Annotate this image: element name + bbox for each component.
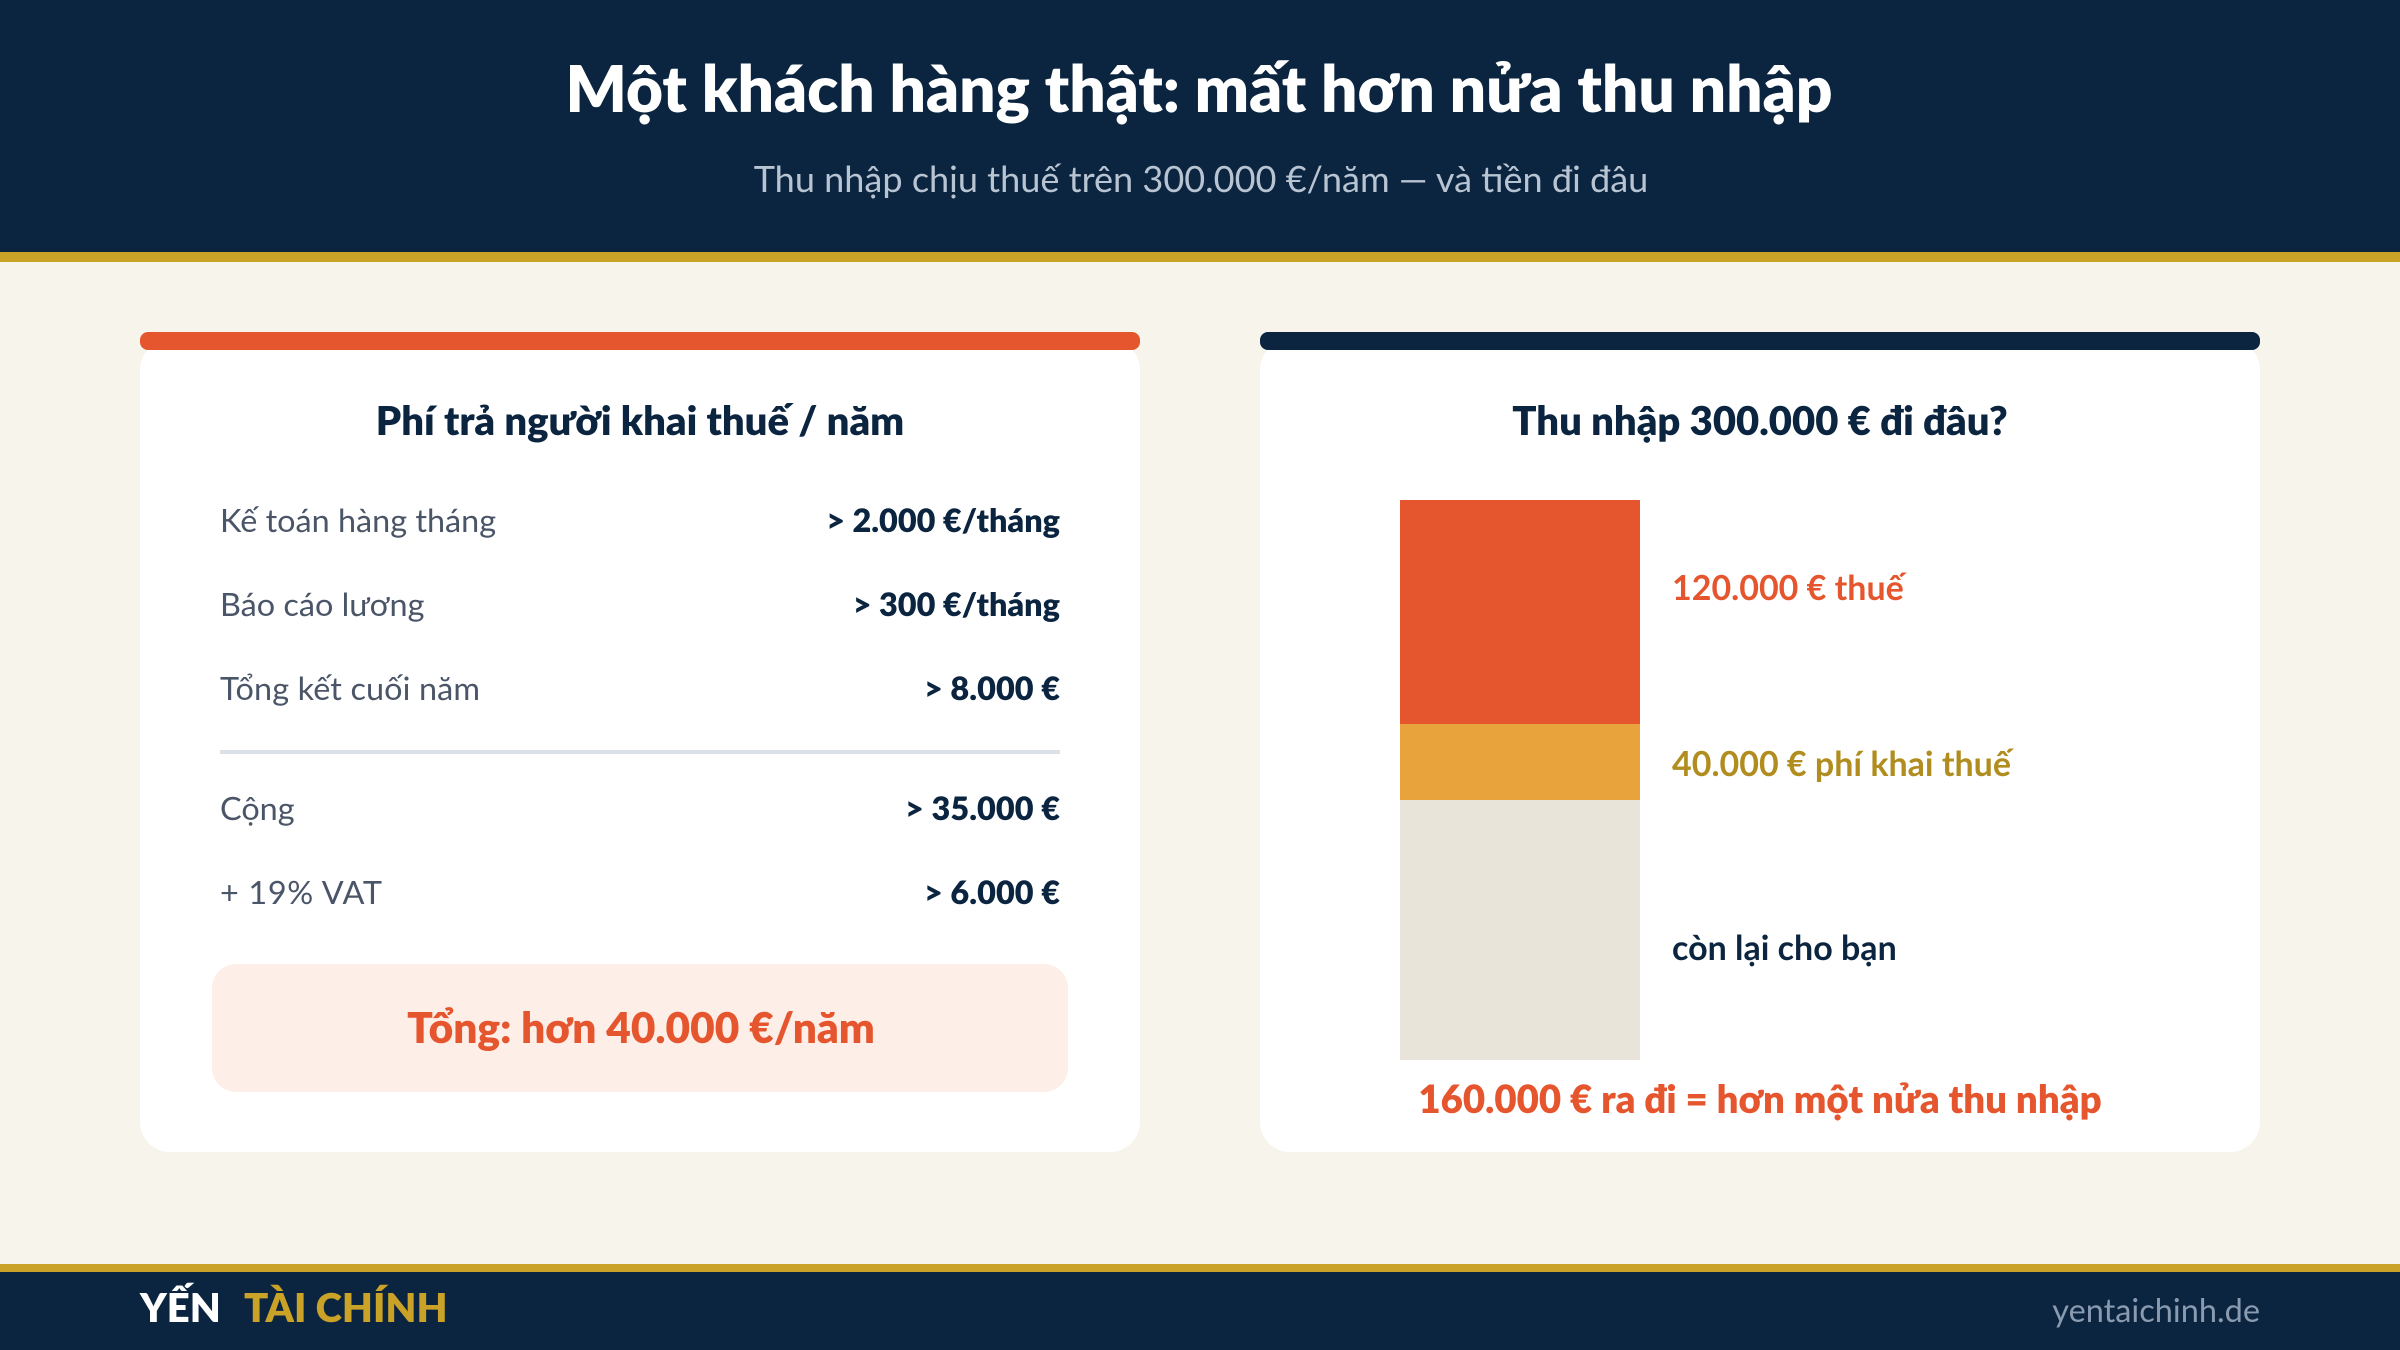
label: tax: 120.000 € thuế [1672, 567, 1908, 608]
fees heading: Phí trả người khai thuế / năm [376, 396, 904, 444]
website: yentaichinh.de [2052, 1290, 2260, 1329]
label: remaining: còn lại cho bạn [1672, 927, 1897, 968]
footer band [0, 1264, 2400, 1350]
row: VAT: + 19% VAT [220, 872, 382, 911]
row: subtotal: > 35.000 € [905, 788, 1060, 827]
panel: income breakdown [1260, 332, 2260, 1152]
row: year-end [220, 668, 1060, 707]
row: year-end: > 8.000 € [924, 668, 1060, 707]
stacked bar chart [1400, 500, 1640, 1060]
row: year-end: Tổng kết cuối năm [220, 668, 480, 707]
total callout: Tổng: hơn 40.000 €/năm [407, 1002, 875, 1053]
panel: fees [140, 332, 1140, 1152]
breakdown heading: Thu nhập 300.000 € đi đâu? [1512, 396, 2008, 444]
row: monthly accounting: > 2.000 €/tháng [826, 500, 1060, 539]
row: subtotal: Cộng [220, 788, 295, 827]
row: payroll: Báo cáo lương [220, 584, 425, 623]
total callout [212, 964, 1068, 1092]
row: VAT: > 6.000 € [924, 872, 1060, 911]
row: payroll: > 300 €/tháng [853, 584, 1060, 623]
row: VAT [220, 872, 1060, 911]
title: Một khách hàng thật: mất hơn nửa thu nhập [565, 49, 1833, 126]
header band [0, 0, 2400, 262]
conclusion: 160.000 € ra đi = hơn một nửa thu nhập [1418, 1076, 2102, 1122]
subtitle: Thu nhập chịu thuế trên 300.000 €/năm — và tiền đi đâu [754, 156, 1648, 200]
brand [139, 1282, 448, 1331]
row: monthly accounting: Kế toán hàng tháng [220, 500, 496, 539]
row: subtotal [220, 788, 1060, 827]
row: monthly accounting [220, 500, 1060, 539]
label: filing fee: 40.000 € phí khai thuế [1672, 743, 2015, 784]
row: payroll [220, 584, 1060, 623]
brand: YẾN [139, 1282, 221, 1331]
brand: TÀI CHÍNH [244, 1283, 448, 1331]
